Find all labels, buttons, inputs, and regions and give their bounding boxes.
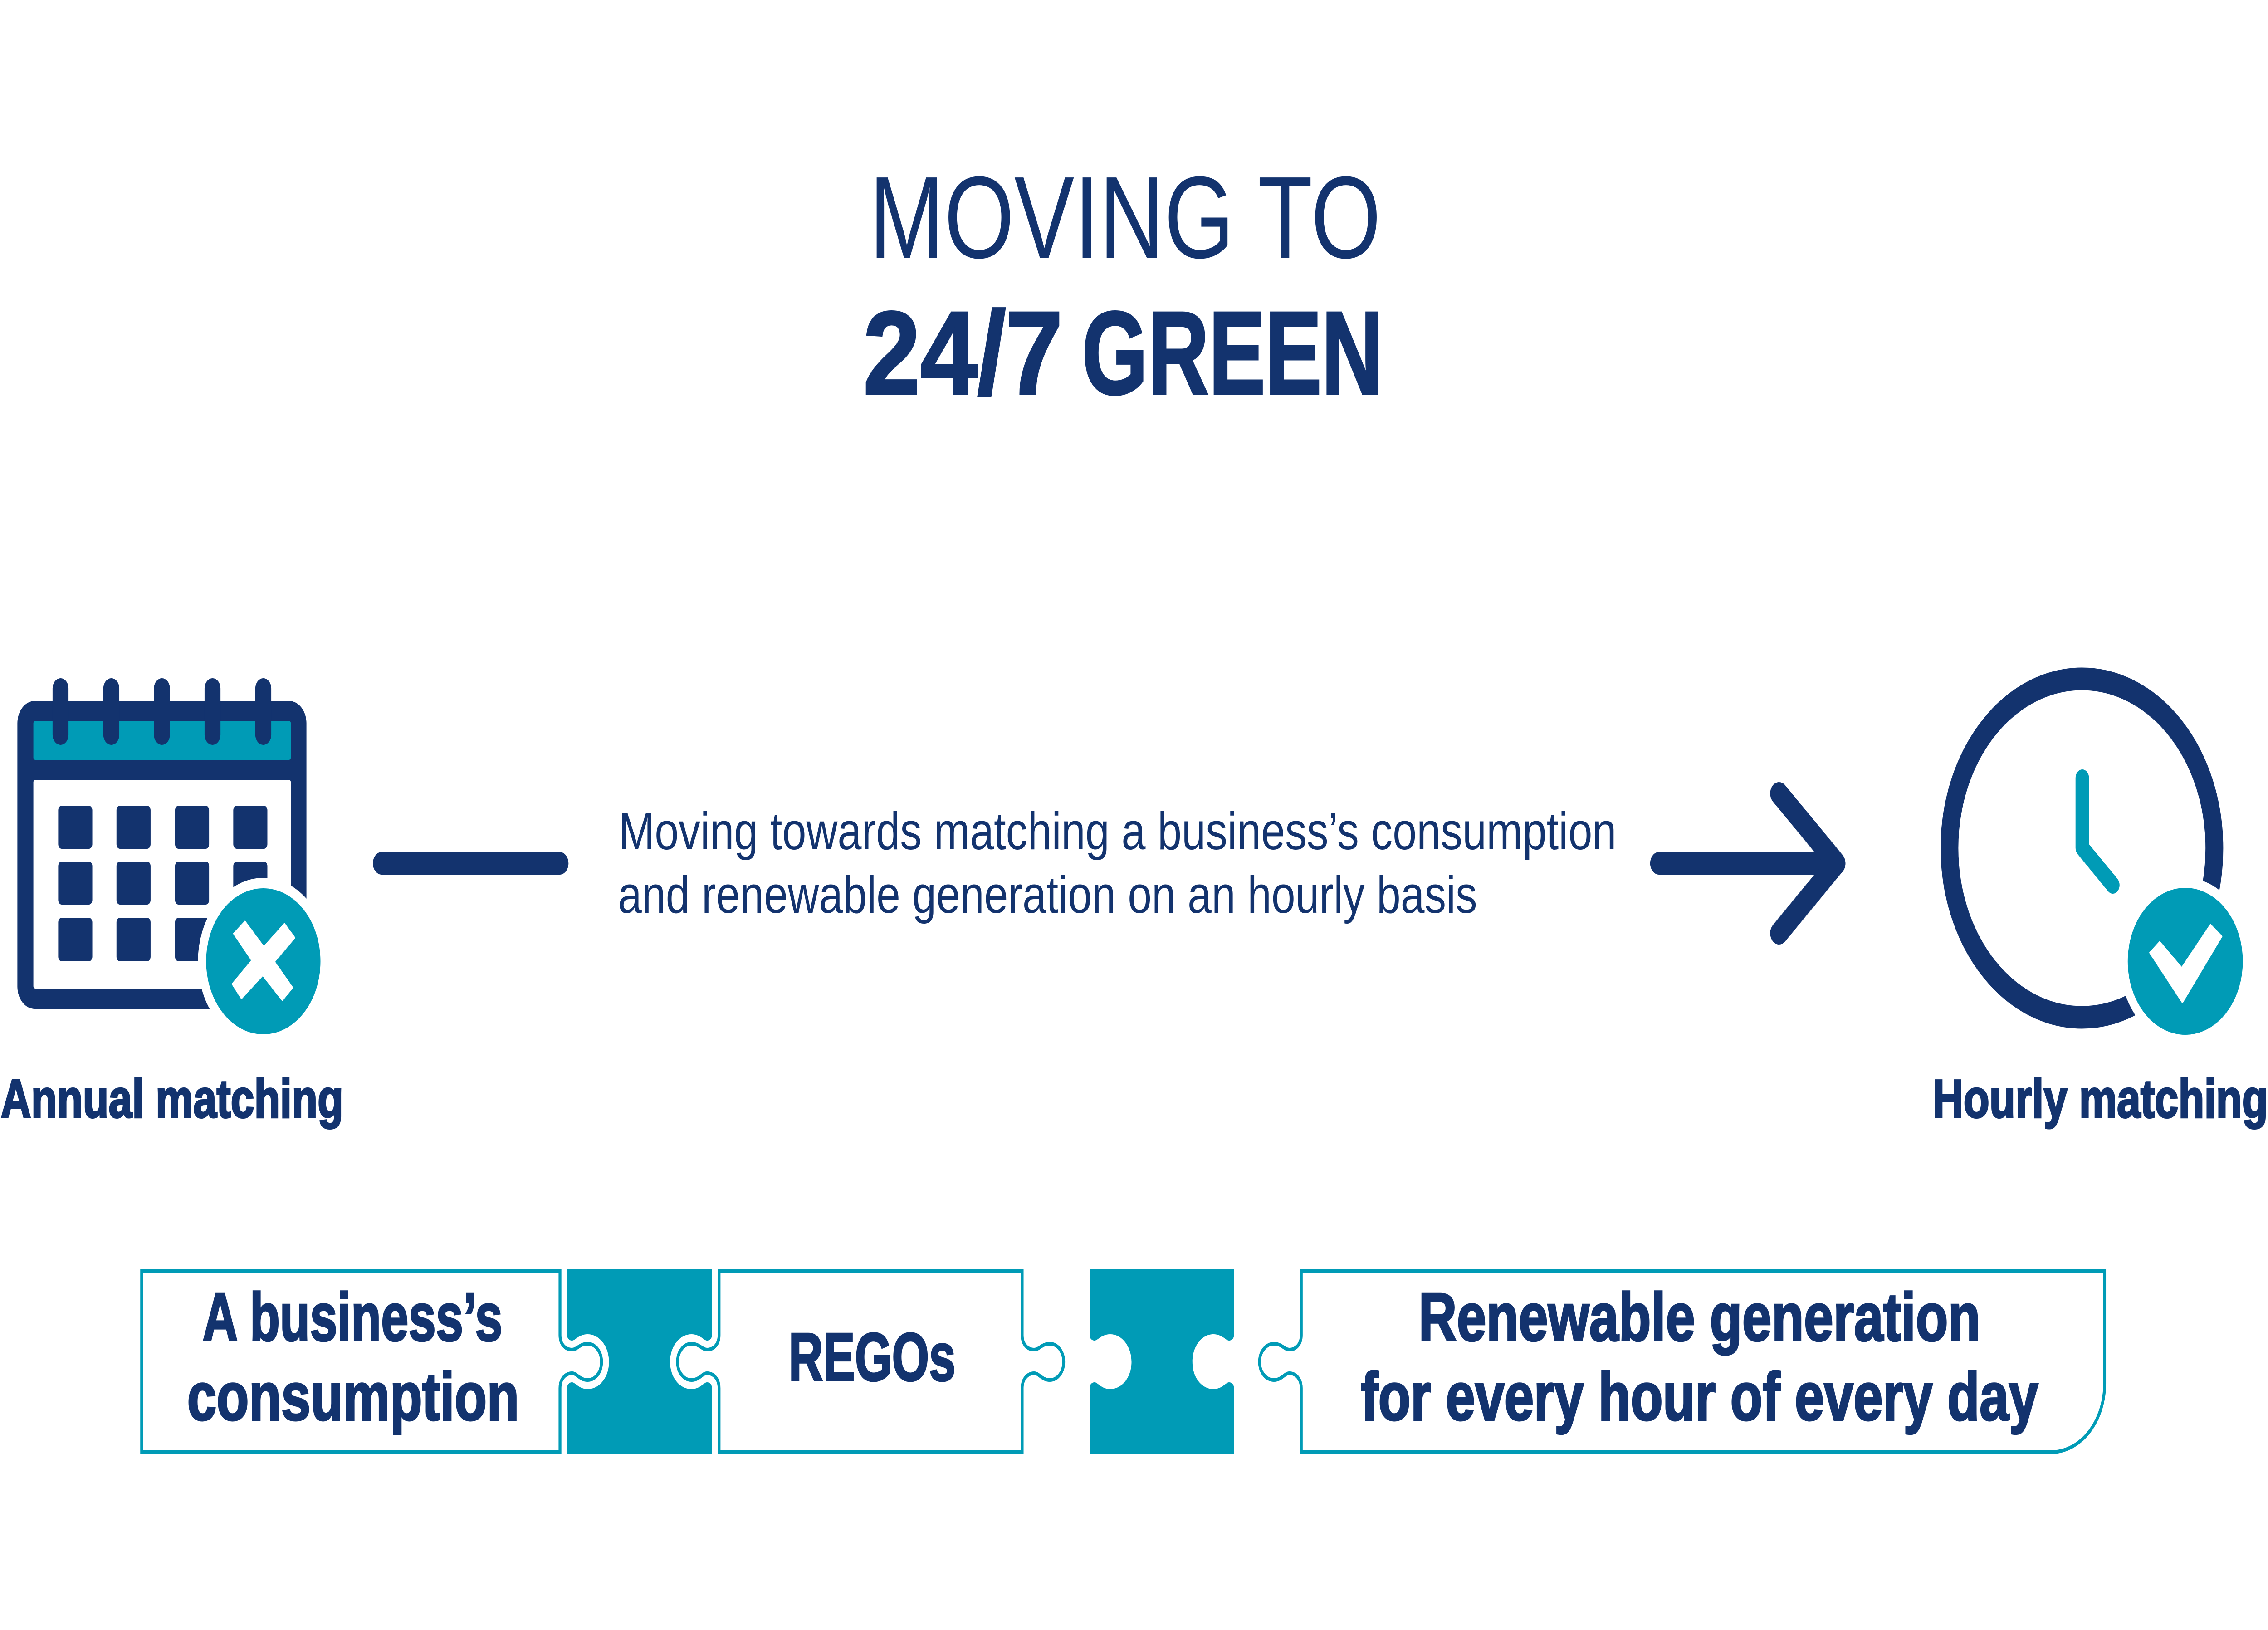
text: renewable generation for every hour of every day: Renewable generation: [1418, 1279, 1980, 1355]
clock face ring: [1950, 679, 2214, 1017]
calendar day squares: [58, 806, 267, 961]
puzzle connector piece 1: [567, 1269, 712, 1454]
text: renewable generation for every hour of every day: [1361, 1279, 2038, 1434]
box: business consumption: [142, 1271, 601, 1452]
description text: [618, 802, 1616, 925]
text: a business's consumption: A business’s: [202, 1279, 503, 1355]
title line 1: MOVING TO: [869, 152, 1381, 283]
description line 1: Moving towards matching a business’s consumption: [619, 802, 1616, 861]
icon: clock with check badge: [1950, 679, 2251, 1045]
calendar body: [34, 780, 291, 989]
text: a business's consumption: consumption: [187, 1358, 519, 1434]
cross badge: [198, 878, 329, 1045]
text: REGOs: REGOs: [789, 1319, 956, 1395]
icon: calendar with cross badge: [17, 678, 329, 1045]
calendar frame: [17, 701, 307, 1009]
text: renewable generation for every hour of every day: for every hour of every day: [1361, 1358, 2038, 1434]
title line 2: GREEN: [1082, 288, 1383, 419]
arrow: [1659, 793, 1837, 933]
title line 2: [863, 288, 1383, 419]
label: hourly matching: Hourly matching: [1933, 1068, 2268, 1129]
puzzle strip: [142, 1269, 2105, 1454]
check badge: [2120, 878, 2251, 1045]
puzzle connector piece 2: [1090, 1269, 1234, 1454]
label: annual matching: Annual matching: [1, 1068, 343, 1129]
calendar header band: [34, 721, 291, 760]
box: REGOs: [678, 1271, 1064, 1452]
text: a business's consumption: [187, 1279, 519, 1434]
title: [863, 152, 1383, 419]
dash line: [382, 852, 560, 875]
calendar binding rings: [53, 678, 271, 745]
clock hands: [2082, 778, 2113, 885]
box: renewable generation: [1260, 1271, 2105, 1452]
description line 2: and renewable generation on an hourly basis: [618, 866, 1477, 925]
title line 2: 24/7: [863, 288, 1063, 419]
